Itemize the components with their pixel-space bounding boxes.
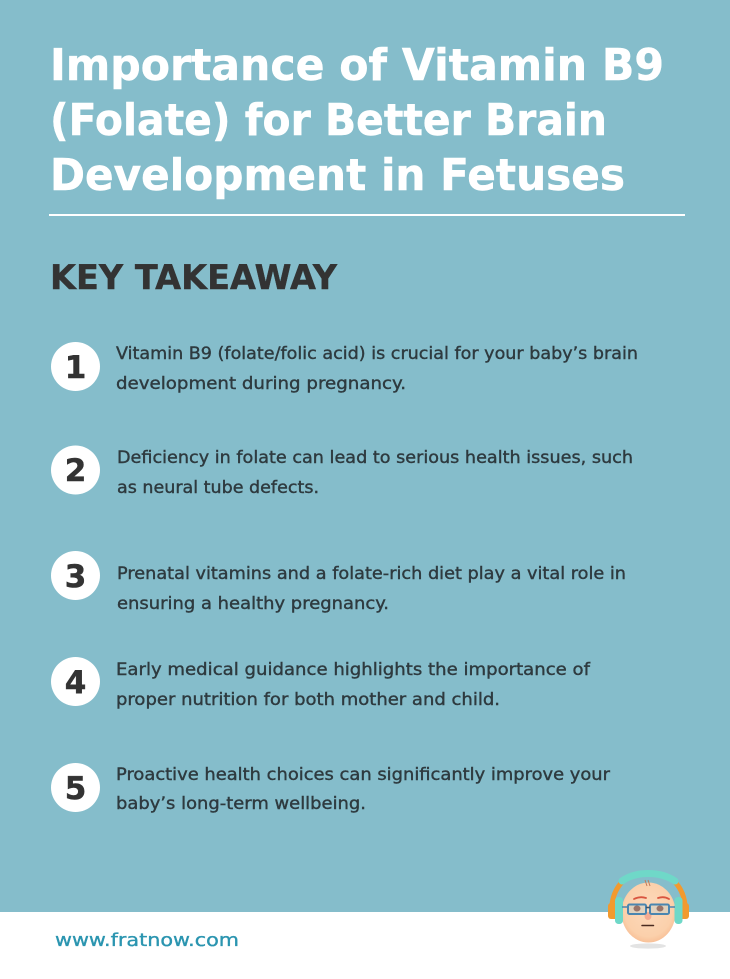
takeaway 3 text: Prenatal vitamins and a folate-rich diet play a vital role in [117, 564, 626, 584]
number badge 3 [51, 551, 100, 600]
takeaway 4 [51, 657, 591, 710]
title: Development in Fetuses [50, 150, 625, 201]
takeaway 2 [51, 446, 633, 498]
takeaway 4 text [116, 660, 591, 710]
takeaway 1 text: Vitamin B9 (folate/folic acid) is crucial for your baby’s brain [116, 344, 638, 364]
title: (Folate) for Better Brain [50, 95, 607, 146]
takeaway 1 [51, 342, 638, 394]
takeaway 1 text: development during pregnancy. [116, 374, 406, 394]
takeaway 3 [51, 551, 626, 614]
takeaway 1 text [116, 344, 638, 394]
takeaway 3 text [117, 564, 626, 614]
number badge 5 [51, 763, 100, 812]
takeaway 3 text: ensuring a healthy pregnancy. [117, 594, 389, 614]
takeaway 5 text: Proactive health choices can significantly improve your [116, 765, 610, 785]
number badge 3: 3 [65, 559, 86, 595]
number badge 4: 4 [65, 665, 86, 701]
takeaway 5 text: baby’s long-term wellbeing. [116, 794, 366, 814]
footer url: www.fratnow.com [55, 930, 239, 951]
takeaway 2 text: Deficiency in folate can lead to serious health issues, such [117, 448, 633, 468]
title [50, 40, 664, 201]
heading: key takeaway: KEY TAKEAWAY [50, 258, 337, 298]
number badge 5: 5 [65, 771, 86, 807]
takeaway 5 text [116, 765, 610, 814]
number badge 2: 2 [65, 453, 86, 489]
number badge 1: 1 [65, 350, 86, 386]
takeaway 5 [51, 763, 610, 814]
takeaway 4 text: Early medical guidance highlights the importance of [116, 660, 591, 680]
number badge 4 [51, 657, 100, 706]
number badge 2 [51, 446, 100, 494]
number badge 1 [51, 342, 100, 391]
takeaway 4 text: proper nutrition for both mother and child. [116, 690, 500, 710]
footer band [0, 912, 730, 979]
takeaway 2 text: as neural tube defects. [117, 478, 319, 498]
icon: mascot with headphones [608, 874, 689, 949]
title: Importance of Vitamin B9 [50, 40, 664, 91]
takeaway 2 text [117, 448, 633, 498]
